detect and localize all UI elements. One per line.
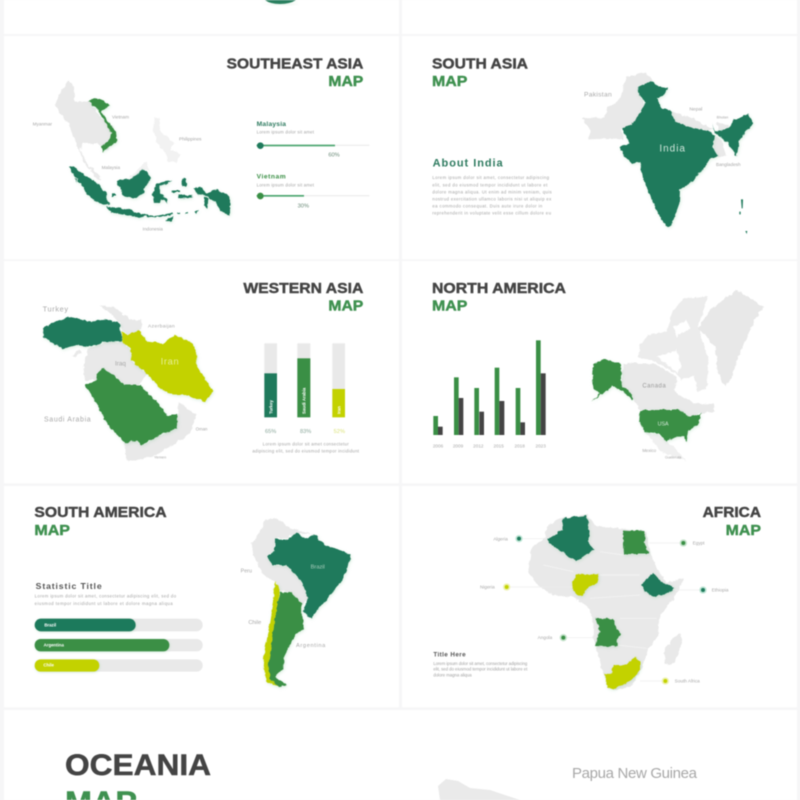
bar: Chile: Chile (43, 663, 55, 668)
map: South America (252, 518, 351, 687)
map labels (43, 304, 208, 459)
bar: Brazil (35, 619, 203, 631)
map: Western Asia (43, 307, 213, 462)
Brazil (267, 533, 351, 618)
text block: About India: elit, sed do eiusmod tempor incididunt ut labore et (432, 182, 548, 187)
text block: About India: Lorem ipsum dolor sit amet, consectetur adipiscing (432, 175, 550, 180)
map labels: Nepal (689, 106, 702, 112)
panel: South Asia (402, 36, 797, 259)
bar chart: North America: 2018 (514, 444, 525, 449)
bar: Chile (35, 659, 203, 672)
map labels: Guatemala (665, 456, 681, 460)
map labels: Bhutan (717, 116, 728, 120)
marker: Egypt (649, 539, 705, 547)
title: Southeast Asia (227, 56, 364, 90)
text block: Statistic Title: Lorem ipsum dolor sit amet, consectetur adipiscing elit, sed do (35, 594, 177, 599)
map labels: Vietnam (112, 115, 129, 120)
text block: Title Here: dolore magna aliqua (433, 672, 472, 677)
panel: Oceania (4, 710, 797, 800)
map: North America (592, 290, 763, 462)
map: Oceania (438, 779, 520, 800)
text block: Title Here (433, 652, 528, 677)
map labels: Canada (642, 384, 666, 390)
map labels: Turkey (43, 304, 68, 313)
text block: About India: ea commodo consequat. Duis aute irure dolor in (432, 203, 543, 208)
title: Southeast Asia: MAP (328, 73, 363, 90)
Nigeria (573, 574, 599, 597)
stat: Malaysia: Malaysia (257, 121, 286, 128)
text block: About India (432, 158, 552, 215)
panel: top right remnant (402, 0, 797, 34)
title: Africa: AFRICA (703, 504, 761, 521)
title: North America: NORTH AMERICA (432, 280, 566, 297)
marker: Ethiopia: Ethiopia (712, 588, 729, 593)
marker: Nigeria (480, 583, 573, 591)
marker: Nigeria: Nigeria (480, 585, 495, 590)
South Africa (604, 657, 640, 689)
USA (639, 410, 702, 443)
map labels: Yemen (154, 454, 166, 459)
caption: adipiscing elit, sed do eiusmod tempor incididunt (252, 449, 360, 454)
title: North America: MAP (432, 298, 467, 315)
marker: South Africa: South Africa (675, 678, 700, 683)
panel: Western Asia (4, 261, 399, 483)
map labels: Chile (248, 620, 261, 626)
bar chart: Western Asia: 65% (265, 429, 276, 435)
title: South Asia (432, 56, 528, 90)
title: Western Asia (243, 280, 364, 315)
map labels: Peru (241, 568, 252, 574)
Turkey (43, 317, 122, 348)
bar chart: North America: 2015 (493, 444, 504, 449)
map labels: Saudi Arabia (44, 416, 91, 423)
panel: top left remnant (4, 0, 399, 34)
bar chart: North America: 2012 (473, 444, 484, 449)
text block: About India: reprehenderit in voluptate velit esse cillum dolore eu (432, 210, 552, 215)
map labels: Azerbaijan (148, 323, 175, 329)
Angola (595, 618, 621, 647)
marker: Angola (538, 634, 595, 641)
title: Southeast Asia: SOUTHEAST ASIA (227, 56, 364, 73)
title: South America: SOUTH AMERICA (34, 504, 167, 521)
caption: Lorem ipsum dolor sit amet consectetur (263, 442, 349, 447)
bar chart: Western Asia: Iran (336, 406, 341, 414)
bar chart: Western Asia: Turkey (268, 400, 273, 414)
map labels (584, 92, 741, 167)
text block: Statistic Title: Statistic Title (36, 581, 102, 591)
map labels: Bangladesh (716, 162, 741, 167)
bar chart: Western Asia: 83% (300, 429, 311, 435)
title: Africa (703, 504, 761, 539)
Egypt (623, 530, 649, 554)
bar: Argentina: Argentina (44, 642, 64, 647)
marker: Egypt: Egypt (693, 541, 705, 546)
bar chart: Western Asia (264, 343, 345, 435)
panel: Southeast Asia (4, 36, 399, 259)
marker: South Africa (640, 677, 700, 685)
text block: About India: dolore magna aliqua. Ut enim ad minim veniam, quis (432, 189, 552, 194)
stat: Malaysia: Lorem ipsum dolor sit amet (257, 129, 315, 134)
title: South America (34, 504, 167, 539)
title: Oceania: OCEANIA (65, 749, 211, 782)
stat: Vietnam: 30% (298, 204, 309, 210)
panel: Africa (402, 486, 797, 707)
stat: Vietnam: Vietnam (257, 174, 286, 181)
Iran (122, 330, 213, 402)
stat: Vietnam: Lorem ipsum dolor sit amet (257, 183, 315, 188)
label: Brazil: Brazil (311, 565, 325, 571)
marker: Algeria (493, 535, 547, 542)
map labels: Indonesia (143, 226, 163, 231)
bar chart: North America: 2023 (535, 444, 546, 449)
title: South Asia: MAP (432, 73, 467, 90)
text block: Title Here: elit, sed do eiusmod tempor incididunt ut labore et (433, 666, 528, 671)
title: South Asia: SOUTH ASIA (432, 56, 528, 73)
bar chart: North America (433, 340, 546, 449)
marker: Algeria: Algeria (493, 536, 508, 541)
map labels: Mexico (642, 448, 657, 453)
title: Western Asia: MAP (328, 298, 363, 315)
bar chart: Western Asia: Saudi Arabia (301, 387, 306, 414)
bar: Argentina (35, 639, 203, 651)
map: Southeast Asia (55, 80, 230, 222)
bar chart: Western Asia: 52% (334, 429, 345, 435)
map remnant (265, 0, 296, 4)
label: Papua New Guinea: Papua New Guinea (572, 765, 698, 782)
label: Iran: Iran (161, 356, 179, 366)
Indonesia (69, 166, 230, 222)
stat: Malaysia: 60% (328, 152, 340, 158)
text block: Title Here: Title Here (433, 652, 466, 659)
map: South Asia (582, 73, 753, 234)
title: Western Asia: WESTERN ASIA (243, 280, 364, 297)
Vietnam (88, 98, 117, 153)
map labels (642, 384, 681, 460)
caption (252, 442, 360, 454)
title: South America: MAP (34, 522, 70, 539)
Alaska (592, 358, 633, 402)
Chile (263, 582, 279, 687)
bar: Brazil: Brazil (44, 623, 56, 628)
Andaman islands (739, 199, 747, 234)
title: Africa: MAP (726, 522, 761, 539)
bar chart: North America: 2009 (453, 444, 464, 449)
Argentina (268, 592, 303, 687)
marker: Angola: Angola (538, 635, 553, 640)
marker: Ethiopia (675, 586, 729, 594)
text block: Statistic Title: eiusmod tempor incididunt ut labore et dolore magna aliqua (35, 601, 173, 606)
panel: South America (4, 486, 399, 707)
bar chart: North America: 2006 (433, 444, 444, 449)
title: North America (432, 280, 566, 315)
map labels: Philippines (179, 136, 202, 141)
Ethiopia (642, 572, 675, 597)
stat: Malaysia (257, 121, 369, 158)
text block: Statistic Title (35, 581, 177, 606)
map labels: Myanmar (33, 121, 53, 126)
Algeria (547, 516, 594, 561)
title: Oceania (65, 749, 211, 800)
label: USA: USA (658, 421, 669, 427)
map labels (33, 115, 202, 231)
Hudson Bay and straits (657, 320, 698, 395)
text block: About India: nostrud exercitation ullamco laboris nisi ut aliquip ex (432, 196, 552, 201)
map labels: Pakistan (584, 92, 612, 99)
Saudi Arabia (85, 368, 178, 445)
text block: Title Here: Lorem ipsum dolor sit amet, consectetur adipiscing (433, 661, 528, 666)
stat: Vietnam (257, 174, 369, 210)
panel: North America (402, 261, 797, 483)
map: Africa (530, 516, 682, 689)
map labels: Iraq (115, 361, 126, 368)
map labels: Malaysia (102, 165, 120, 170)
text block: About India: About India (433, 158, 504, 170)
label: India: India (659, 144, 685, 155)
map labels: Oman (196, 427, 208, 432)
map labels: Argentina (296, 643, 326, 649)
map labels (241, 568, 326, 649)
India (620, 81, 753, 227)
